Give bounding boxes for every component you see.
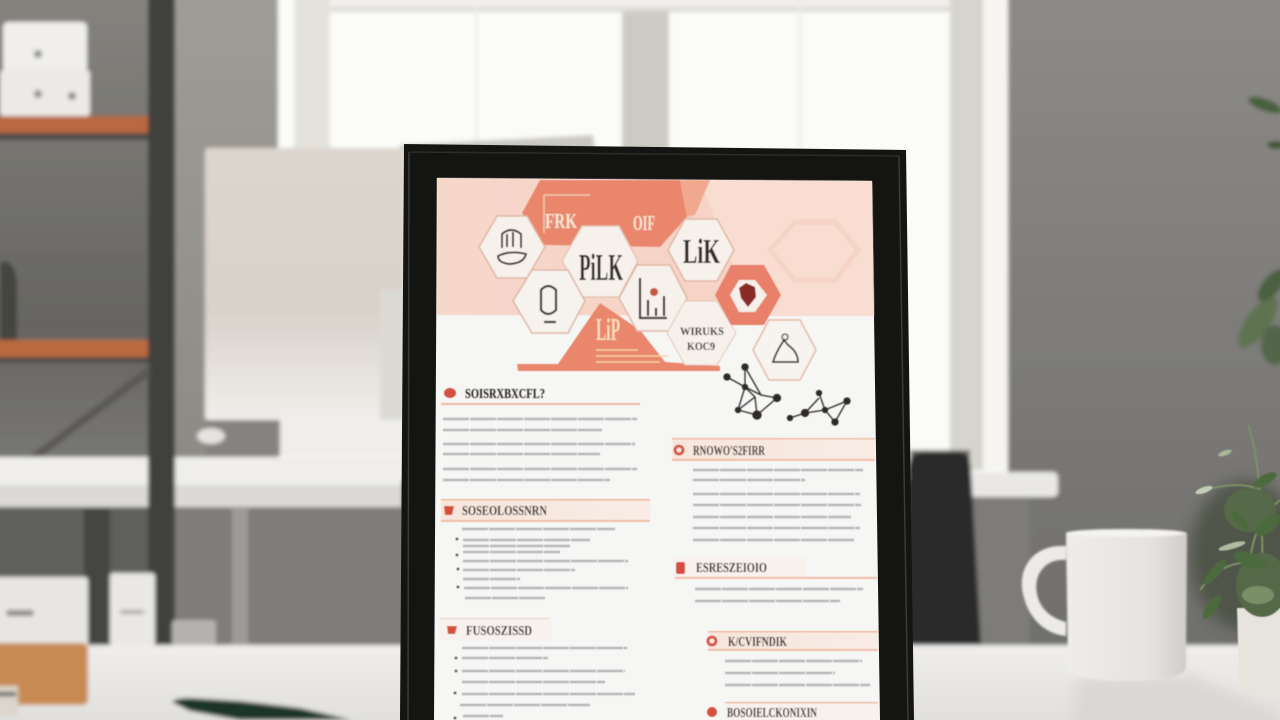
picture frame: [400, 144, 914, 720]
header text in banner: [544, 195, 655, 235]
plant shadow foliage: [1190, 480, 1280, 630]
right wall: [1008, 0, 1280, 720]
plant leaves upper right: [1231, 93, 1280, 365]
section: right four: [707, 702, 878, 720]
hexagon: bar icon large: [562, 226, 638, 297]
hexagon: chart icon right: LiK: [683, 232, 720, 271]
header text in banner: FRK: [545, 209, 577, 233]
hexagon: bar icon large: PiLK: [579, 247, 623, 289]
poster: [434, 178, 880, 720]
pen: [172, 698, 352, 720]
hexagon: scales icon: [479, 216, 545, 278]
section heading: FUSOSZISSD: [466, 624, 532, 639]
hexagon: text label: KOC9: [687, 339, 715, 353]
desk surface: [0, 645, 1280, 720]
banner lines: [596, 311, 668, 362]
section icon: [444, 506, 454, 515]
potted plant: [1195, 425, 1280, 694]
poster sheet: [434, 178, 880, 720]
section heading: K/CVIFNDIK: [728, 635, 787, 650]
hexagon: highlighted red icon: [715, 265, 781, 325]
monitor: [197, 135, 595, 456]
section heading: RNOWO'S2FIRR: [693, 444, 766, 459]
shelf unit: [0, 0, 175, 650]
lower wall left of frame: [175, 505, 410, 650]
section icon: [707, 707, 717, 717]
section icon: [675, 446, 683, 454]
section: right three: [708, 631, 878, 685]
mug shadow: [1075, 676, 1280, 720]
notebook: [0, 643, 88, 716]
orange lower block: [517, 303, 720, 371]
section: left two: [441, 499, 650, 598]
banner lines: LiP: [596, 311, 620, 347]
section icon: [676, 562, 685, 574]
window sill: [970, 472, 1058, 497]
section: right one: [672, 438, 875, 540]
section body lines: [725, 661, 870, 685]
poster header banner: [437, 178, 874, 371]
side desk: [0, 457, 402, 648]
bullet list: [462, 529, 628, 598]
section: left three: [440, 618, 635, 719]
hexagon: chart icon centre: [619, 265, 687, 331]
hexagon cluster: [479, 216, 816, 380]
section body lines: [693, 470, 863, 540]
section body lines: [443, 419, 637, 480]
section body lines: [695, 589, 863, 601]
network diagram right: [788, 390, 850, 425]
section: right two: [675, 558, 877, 601]
section: left one: [441, 387, 640, 480]
section icon: [444, 388, 456, 398]
hexagon: text label: [667, 301, 736, 365]
hexagon: bell icon: [753, 320, 816, 380]
bullet list: [460, 648, 635, 716]
section heading: SOSEOLOSSNRN: [462, 504, 547, 519]
header text in banner: OIF: [633, 211, 655, 235]
section heading: ESRESZEIOIO: [696, 561, 767, 576]
coffee mug: [1022, 529, 1187, 681]
hexagon: text label: WIRUKS: [680, 324, 724, 338]
orange top block: [522, 180, 687, 247]
left wall: [0, 0, 160, 720]
white storage boxes: [0, 22, 216, 647]
network diagram left: [724, 364, 780, 419]
window: [278, 0, 1009, 480]
hexagon: microphone icon: [513, 270, 585, 333]
hexagon: chart icon right: [668, 219, 734, 281]
chair: [908, 452, 981, 645]
section heading: SOISRXBXCFL?: [465, 387, 545, 402]
section icon: [447, 626, 457, 634]
section icon: [708, 637, 716, 645]
